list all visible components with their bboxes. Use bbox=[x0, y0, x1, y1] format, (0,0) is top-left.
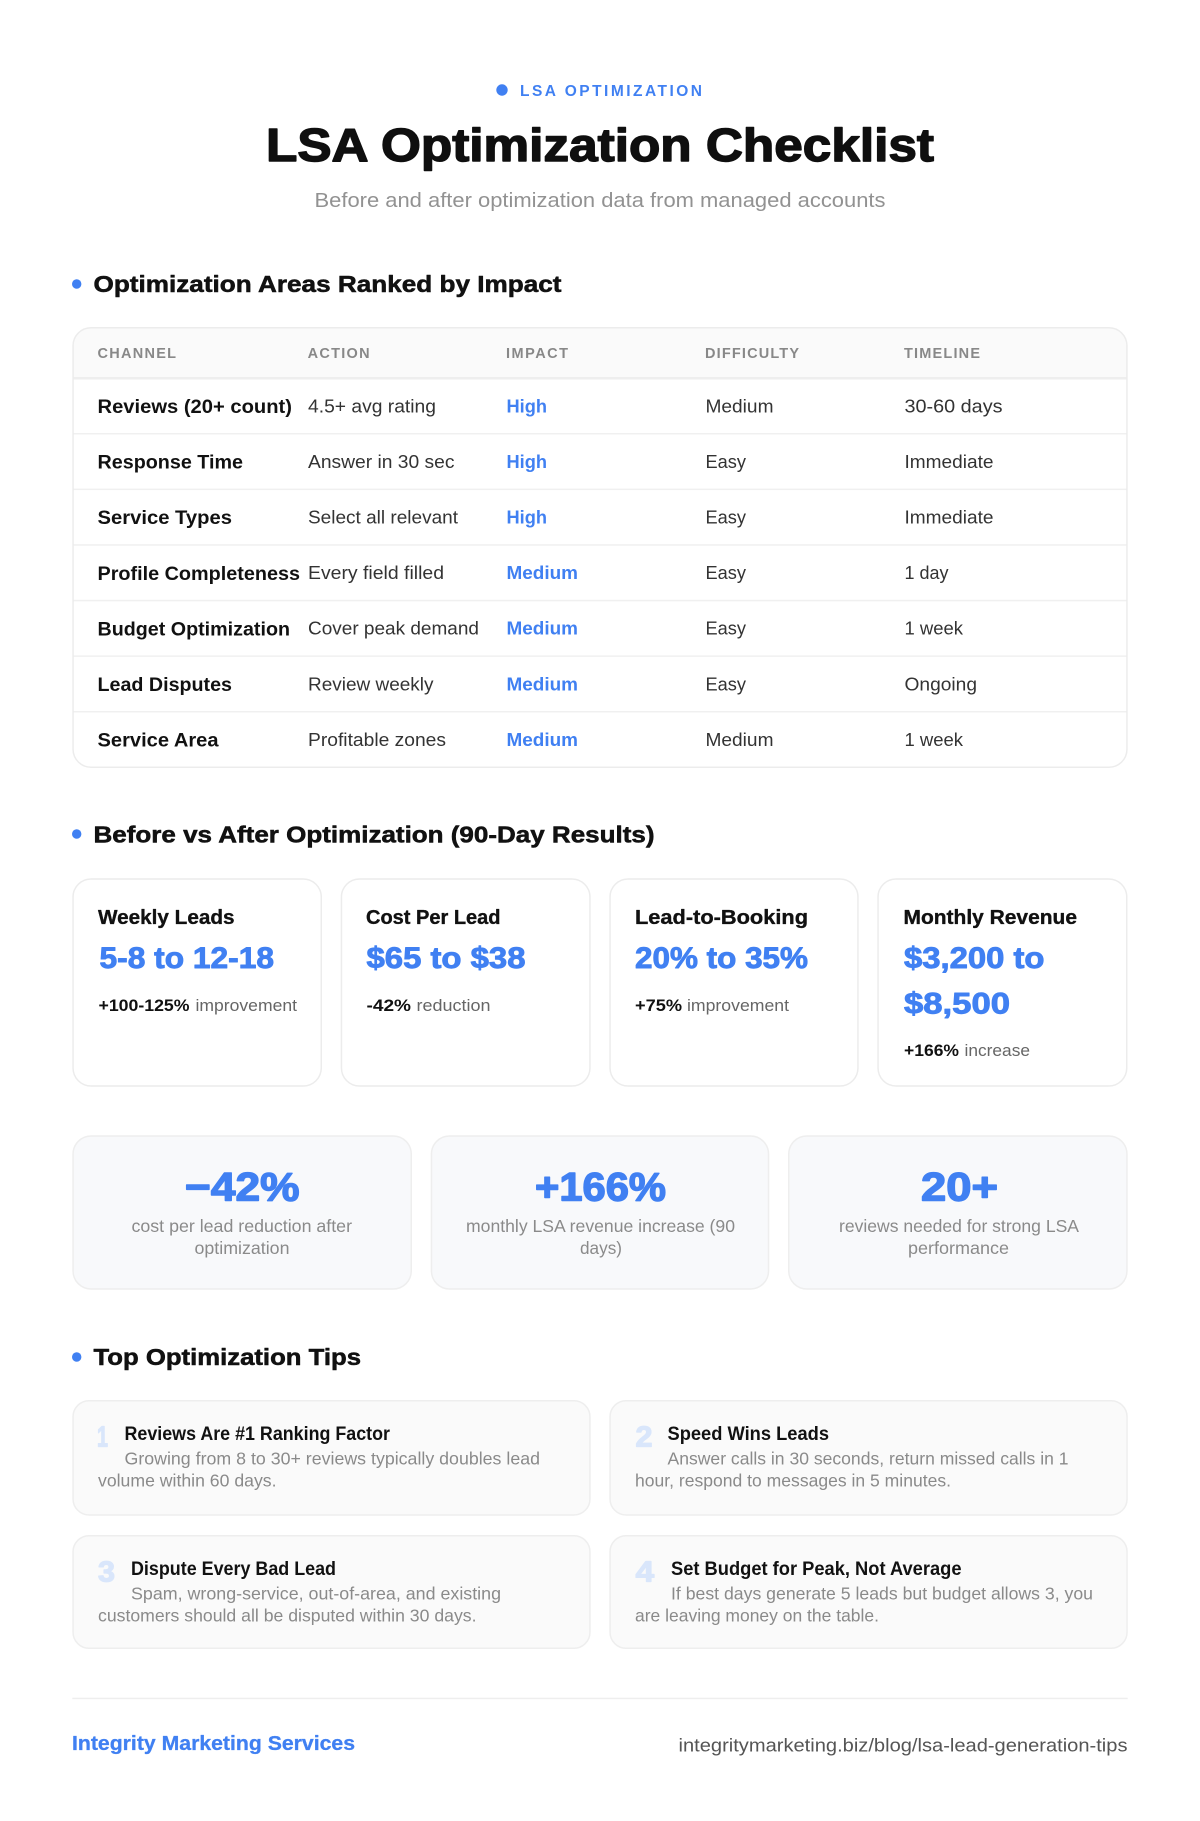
row: response time: Immediate bbox=[904, 452, 994, 472]
card: monthly revenue: +166% bbox=[904, 1041, 959, 1060]
section heading: top tips: Top Optimization Tips bbox=[94, 1344, 361, 1370]
title: LSA Optimization Checklist bbox=[266, 119, 934, 171]
row: lead disputes: Ongoing bbox=[904, 674, 977, 694]
row: service area: Medium bbox=[706, 730, 774, 750]
stat: reviews needed bbox=[789, 1136, 1127, 1289]
tip 3 bbox=[73, 1536, 590, 1648]
card: weekly leads: 5-8 to 12-18 bbox=[100, 942, 274, 975]
table header row: IMPACT bbox=[506, 346, 568, 362]
card: weekly leads bbox=[73, 879, 321, 1086]
stat: cost per lead reduction: cost per lead reduction after bbox=[132, 1216, 352, 1236]
stat: revenue increase: days) bbox=[580, 1238, 622, 1258]
tip 1: volume within 60 days. bbox=[98, 1471, 276, 1491]
row: response time: Answer in 30 sec bbox=[308, 452, 454, 472]
stat: reviews needed: performance bbox=[908, 1238, 1009, 1258]
stat: revenue increase: +166% bbox=[535, 1165, 666, 1209]
row: reviews: 4.5+ avg rating bbox=[308, 396, 436, 416]
row: lead disputes: Medium bbox=[506, 674, 578, 694]
row: response time: Easy bbox=[706, 452, 746, 472]
eyebrow label: LSA OPTIMIZATION bbox=[520, 83, 702, 100]
row: response time bbox=[98, 452, 994, 474]
row: service area: Medium bbox=[506, 730, 578, 750]
row: lead disputes: Lead Disputes bbox=[98, 675, 232, 696]
table header row: CHANNEL bbox=[98, 346, 176, 362]
card: lead-to-booking: 20% to 35% bbox=[635, 942, 808, 975]
footer bbox=[72, 1732, 1128, 1756]
tip 1: 1 bbox=[97, 1422, 108, 1454]
row: service types: Service Types bbox=[98, 508, 232, 529]
row: profile completeness: Easy bbox=[706, 563, 746, 583]
row: service types bbox=[98, 508, 994, 529]
card: cost per lead: $65 to $38 bbox=[366, 942, 526, 975]
table header row: DIFFICULTY bbox=[705, 346, 799, 362]
table header row: ACTION bbox=[308, 346, 370, 362]
row: budget optimization: Medium bbox=[506, 619, 578, 639]
tip 4: are leaving money on the table. bbox=[635, 1606, 879, 1626]
row: reviews: Reviews (20+ count) bbox=[98, 397, 292, 418]
tip 4: If best days generate 5 leads but budget allows 3, you bbox=[671, 1583, 1093, 1603]
card: monthly revenue: increase bbox=[964, 1041, 1030, 1060]
tip 2: hour, respond to messages in 5 minutes. bbox=[635, 1471, 951, 1491]
row: response time: Response Time bbox=[98, 453, 243, 474]
row: lead disputes: Easy bbox=[706, 674, 746, 694]
card: monthly revenue: $3,200 to bbox=[904, 942, 1044, 975]
tip 2: 2 bbox=[636, 1422, 652, 1454]
row: reviews bbox=[98, 396, 1002, 418]
stat: reviews needed: 20+ bbox=[921, 1165, 998, 1209]
footer url: integritymarketing.biz/blog/lsa-lead-generation-tips bbox=[678, 1735, 1128, 1756]
tip 3: Dispute Every Bad Lead bbox=[131, 1559, 336, 1580]
row: profile completeness: 1 day bbox=[904, 563, 948, 583]
row: budget optimization: 1 week bbox=[904, 619, 964, 639]
row: profile completeness: Profile Completeness bbox=[98, 564, 300, 585]
row: lead disputes bbox=[98, 674, 977, 696]
card: weekly leads: Weekly Leads bbox=[98, 907, 235, 929]
row: reviews: Medium bbox=[706, 396, 774, 416]
footer brand: Integrity Marketing Services bbox=[72, 1732, 355, 1755]
card: cost per lead: -42% bbox=[366, 996, 411, 1015]
row: response time: High bbox=[506, 452, 547, 472]
card: monthly revenue: $8,500 bbox=[904, 988, 1010, 1020]
row: service types: Easy bbox=[706, 508, 746, 528]
card: cost per lead: reduction bbox=[416, 996, 490, 1015]
row: budget optimization bbox=[98, 619, 964, 640]
row: service area: 1 week bbox=[904, 730, 964, 750]
row: service area: Profitable zones bbox=[308, 730, 446, 750]
card: lead-to-booking: Lead-to-Booking bbox=[635, 907, 808, 929]
header block bbox=[266, 83, 934, 212]
section heading: optimization areas: Optimization Areas Ranked by Impact bbox=[94, 271, 562, 297]
card: weekly leads: improvement bbox=[196, 996, 297, 1015]
tip 2: Answer calls in 30 seconds, return missed calls in 1 bbox=[668, 1448, 1068, 1468]
card: lead-to-booking: +75% bbox=[635, 996, 682, 1015]
tip 1: Reviews Are #1 Ranking Factor bbox=[124, 1424, 391, 1445]
tip 3: 3 bbox=[98, 1557, 115, 1589]
card: cost per lead bbox=[341, 879, 590, 1086]
row: profile completeness: Every field filled bbox=[308, 563, 444, 583]
stat: revenue increase: monthly LSA revenue increase (90 bbox=[466, 1216, 735, 1236]
row: service types: Select all relevant bbox=[308, 508, 458, 528]
card: lead-to-booking: improvement bbox=[687, 996, 789, 1015]
row: reviews: 30-60 days bbox=[904, 396, 1002, 416]
row: service area: Service Area bbox=[98, 731, 219, 752]
card: monthly revenue: Monthly Revenue bbox=[904, 907, 1077, 929]
row: profile completeness bbox=[98, 563, 948, 585]
row: budget optimization: Budget Optimization bbox=[98, 619, 290, 640]
table header row: TIMELINE bbox=[904, 346, 980, 362]
tip 4: Set Budget for Peak, Not Average bbox=[671, 1559, 962, 1580]
tip 1 bbox=[73, 1401, 590, 1515]
row: budget optimization: Cover peak demand bbox=[308, 619, 479, 639]
card: weekly leads: +100-125% bbox=[98, 996, 190, 1015]
card: lead-to-booking bbox=[610, 879, 858, 1086]
table header row bbox=[74, 348, 1126, 380]
tip 3: customers should all be disputed within 30 days. bbox=[98, 1606, 477, 1626]
row: lead disputes: Review weekly bbox=[308, 674, 434, 694]
tip 2: Speed Wins Leads bbox=[668, 1424, 829, 1445]
stat: cost per lead reduction bbox=[73, 1136, 411, 1289]
row: service types: Immediate bbox=[904, 508, 994, 528]
card: cost per lead: Cost Per Lead bbox=[366, 907, 500, 929]
row: budget optimization: Easy bbox=[706, 619, 746, 639]
stat: revenue increase bbox=[431, 1136, 769, 1289]
card: monthly revenue bbox=[878, 879, 1127, 1086]
row: reviews: High bbox=[506, 396, 547, 416]
row: service types: High bbox=[506, 508, 547, 528]
stat: reviews needed: reviews needed for strong LSA bbox=[839, 1216, 1079, 1236]
tip 4 bbox=[610, 1536, 1127, 1648]
subtitle: Before and after optimization data from managed accounts bbox=[314, 189, 886, 212]
panel: optimization table bbox=[72, 327, 1128, 767]
section heading: before vs after: Before vs After Optimization (90-Day Results) bbox=[94, 821, 654, 847]
tip 2 bbox=[610, 1401, 1127, 1515]
tip 1: Growing from 8 to 30+ reviews typically doubles lead bbox=[124, 1448, 540, 1468]
stat: cost per lead reduction: −42% bbox=[185, 1165, 300, 1209]
tip 4: 4 bbox=[636, 1557, 654, 1589]
stat: cost per lead reduction: optimization bbox=[194, 1238, 290, 1258]
tip 3: Spam, wrong-service, out-of-area, and existing bbox=[131, 1583, 501, 1603]
row: profile completeness: Medium bbox=[506, 563, 578, 583]
row: service area bbox=[98, 730, 964, 752]
